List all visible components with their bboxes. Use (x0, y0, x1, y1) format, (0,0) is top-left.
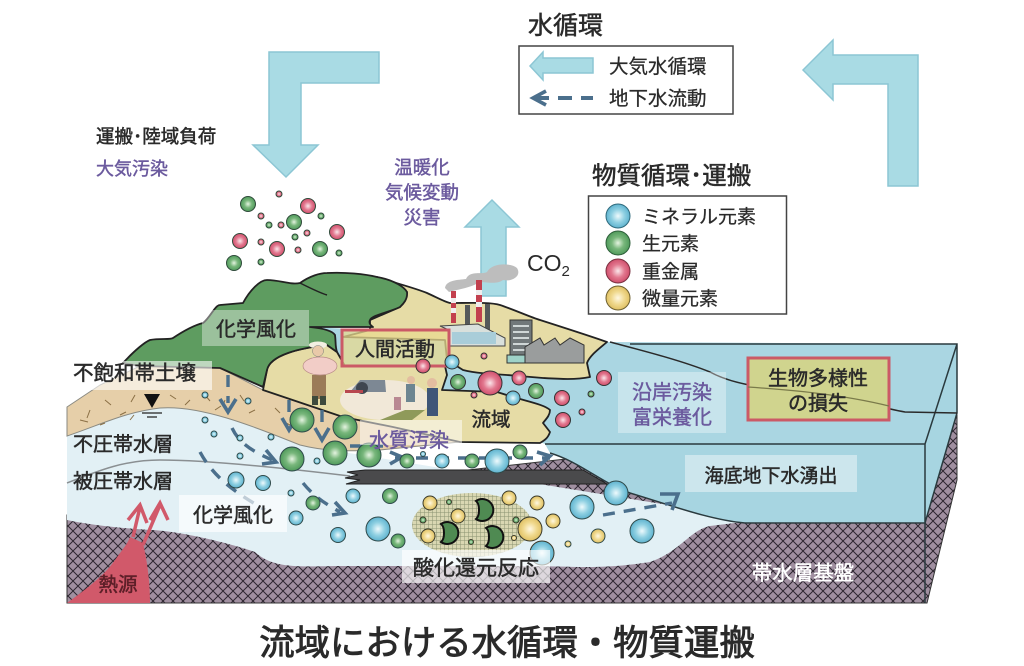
ridge line (300, 283, 327, 295)
legend: material types (588, 196, 786, 314)
label: confined aquifer: 被圧帯水層 (73, 470, 173, 493)
legend heading: water cycle: 水循環 (528, 12, 603, 40)
land: upland (343, 277, 607, 379)
impermeable layer (345, 470, 607, 484)
red-framed box: biodiversity loss: 生物多様性 (768, 367, 868, 390)
factory and smokestacks (440, 264, 584, 363)
label: warming, climate change, disasters: 気候変動 (385, 182, 459, 203)
sea particles (416, 353, 612, 428)
water table symbol (142, 394, 162, 417)
label: coastal pollution and eutrophication: 沿岸汚染 (632, 381, 712, 404)
label: water pollution: 水質汚染 (369, 429, 449, 452)
label: chemical weathering, lower: 化学風化 (193, 504, 273, 527)
label: chemical weathering, upper: 化学風化 (216, 318, 296, 341)
legend: water cycle (519, 46, 733, 114)
arrow: CO2 rising (465, 200, 519, 296)
label: aquifer bedrock: 帯水層基盤 (752, 562, 854, 585)
label: chemical weathering, upper (202, 310, 309, 346)
legend: material types: 重金属 (642, 261, 699, 283)
soil texture (80, 395, 290, 425)
label: warming, climate change, disasters: 災害 (403, 207, 441, 228)
redox reaction zone with microbes (412, 491, 560, 565)
red-framed box: human activities: 人間活動 (355, 338, 435, 361)
label: unconfined aquifer: 不圧帯水層 (73, 433, 173, 456)
red-framed box: human activities (342, 330, 449, 366)
title: 流域における水循環・物質運搬 (259, 623, 755, 663)
label: unsaturated soil zone: 不飽和帯土壌 (73, 362, 196, 385)
arrow: atmospheric water returning (803, 40, 918, 186)
legend: material types: 微量元素 (642, 288, 718, 310)
label: chemical weathering, lower (179, 495, 287, 532)
farming scene (340, 376, 438, 420)
label: basin: 流域 (471, 409, 511, 431)
red-framed box: biodiversity loss (748, 358, 889, 420)
label: transport and land load: 運搬･陸域負荷 (96, 126, 216, 147)
subsurface particles (202, 392, 654, 548)
soil layer (67, 366, 460, 451)
label: water pollution (360, 420, 462, 452)
legend: water cycle: 地下水流動 (609, 88, 707, 110)
legend heading: material cycle and transport: 物質循環･運搬 (592, 162, 751, 190)
label: submarine groundwater discharge (685, 455, 857, 492)
legend: material types: 生元素 (642, 233, 699, 255)
label: coastal pollution and eutrophication: 富栄養化 (632, 406, 712, 429)
legend: material types: ミネラル元素 (642, 206, 756, 228)
label: CO2: CO (527, 250, 562, 276)
legend: water cycle: 大気水循環 (609, 56, 707, 78)
bedrock (67, 415, 957, 603)
land: green mountains (123, 273, 407, 387)
label: CO2: 2 (562, 263, 570, 280)
farmer with pig (303, 342, 337, 405)
heat source (67, 503, 168, 603)
sea (310, 327, 957, 603)
label: coastal pollution and eutrophication (618, 372, 726, 433)
label: air pollution: 大気汚染 (96, 159, 168, 179)
aquifer (67, 408, 760, 567)
label: submarine groundwater discharge: 海底地下水湧出 (704, 465, 838, 487)
red-framed box: biodiversity loss: の損失 (788, 392, 848, 415)
label: redox reaction: 酸化還元反応 (413, 557, 539, 580)
label: redox reaction (402, 550, 550, 583)
groundwater flow arrows (200, 375, 678, 515)
label: warming, climate change, disasters: 温暖化 (394, 157, 450, 178)
atmospheric particles (226, 191, 344, 270)
arrow: atmospheric water descending (253, 52, 379, 177)
land: lowlands (263, 345, 550, 443)
aquifer boundary (67, 460, 350, 483)
shoreline (610, 342, 957, 413)
heat source: 熱源 (98, 574, 138, 596)
label: unsaturated soil zone (72, 361, 212, 390)
label: warming, climate change, disasters (385, 157, 459, 228)
